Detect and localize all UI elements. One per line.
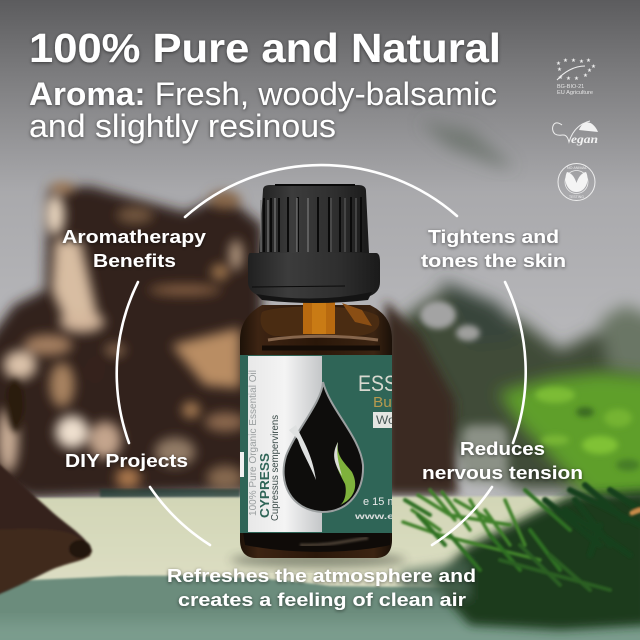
label: aromatherapy benefits: Benefits [93,251,176,271]
label brand text: www.esse [354,511,415,521]
icon: EU organic leaf badge: ★ [558,74,563,81]
label: aromatherapy benefits [62,227,206,271]
ribbed cap [259,184,369,253]
bottle base [243,532,390,552]
table surface [0,489,640,640]
icon: EU organic leaf badge: ★ [563,57,568,64]
icon: EU organic leaf badge: ★ [586,57,591,64]
icon: vegan logo: egan [571,132,598,146]
background: blurred dark branch top [420,122,515,168]
icon: EU organic leaf badge: ★ [587,67,592,74]
icon: vegan logo [553,121,598,146]
foreground rock bottom-left [0,456,92,598]
icon: EU organic leaf badge [556,57,596,96]
subtitle: aroma [29,76,497,144]
subtitle: aroma: Aroma: Fresh, woody-balsamic [29,76,497,112]
label side text: CYPRESS [257,453,272,518]
background: far right rock [385,300,508,495]
bottle label [240,355,392,533]
label: tightens and tones: Tightens and [428,227,559,247]
icon: EU organic leaf badge: ★ [583,72,588,79]
label: tightens and tones: tones the skin [421,251,566,271]
label brand text: e 15 ml [363,496,399,508]
amber oil and dropper [261,300,380,348]
background: blurred cypress foliage right [395,280,640,500]
bottle glass body [240,305,392,558]
dropper cap collar [248,253,380,303]
label: tightens and tones [421,227,566,271]
label brand text: Work [376,413,407,427]
icon: EU organic leaf badge: ★ [557,66,562,73]
label: DIY projects: DIY Projects [65,451,188,471]
icon: EU organic leaf badge: ★ [574,75,579,82]
icon: no animal testing badge [558,164,595,200]
bottle [240,184,392,558]
bottle shadow [230,552,406,568]
label: aromatherapy benefits: Aromatherapy [62,227,206,247]
icon: EU organic leaf badge: BG-BIO-21 [557,84,584,90]
circle arc segments [117,165,526,545]
label: refreshes the atmosphere [167,566,476,610]
icon: EU organic leaf badge: ★ [556,60,561,67]
title: 100% Pure and Natural [29,25,501,71]
icon: EU organic leaf badge: ★ [566,75,571,82]
subtitle: aroma: and slightly resinous [29,108,336,144]
label: refreshes the atmosphere: Refreshes the atmosphere and [167,566,476,586]
icon: EU organic leaf badge: ★ [591,63,596,70]
label brand text: Bulk [373,394,404,411]
label: reduces nervous tension [422,439,583,483]
background: blurred brown rock left [0,183,262,498]
icon: EU organic leaf badge: EU Agriculture [557,90,593,96]
label brand text: ESSE [358,371,410,396]
icon: no animal testing badge: TESTING [569,195,584,199]
label side text: 100% Pure Organic Essential Oil [247,370,259,516]
label brand text [355,376,392,519]
label: reduces nervous tension: Reduces [460,439,545,459]
icon: EU organic leaf badge: ★ [579,58,584,65]
icon: black oil drop [284,382,363,512]
icon: no animal testing badge: NO ANIMAL [567,166,587,170]
label side text: Cupressus sempervirens [269,415,281,521]
label side text [247,370,281,521]
icon: EU organic leaf badge: ★ [571,57,576,64]
label: refreshes the atmosphere: creates a feeling of clean air [178,590,466,610]
label: reduces nervous tension: nervous tension [422,463,583,483]
foreground sharp cypress branch right [400,485,640,630]
